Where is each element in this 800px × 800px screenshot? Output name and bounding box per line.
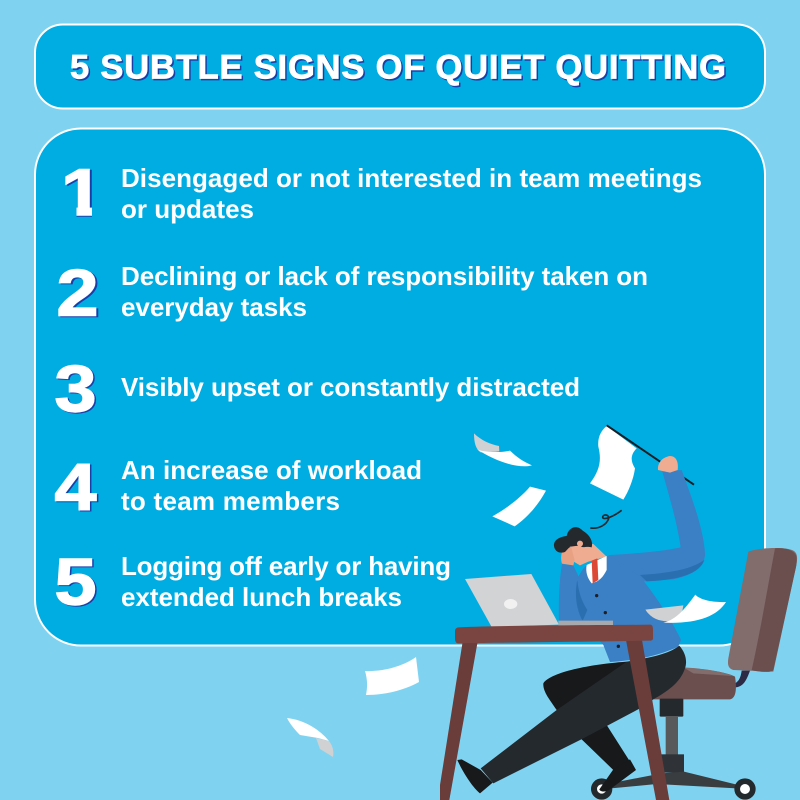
- ear: [577, 541, 583, 547]
- title: 5 SUBTLE SIGNS OF QUIET QUITTING: [72, 50, 728, 88]
- sign 4: to team members: [121, 486, 340, 516]
- hair: [554, 527, 592, 553]
- sign 2: [56, 256, 648, 330]
- flag pole: [607, 425, 694, 485]
- flying paper: middle: [492, 487, 546, 526]
- sign 4: [54, 450, 422, 524]
- far shoe: [599, 759, 636, 791]
- laptop screen: [465, 574, 559, 627]
- sign 2: Declining or lack of responsibility taken on: [121, 261, 648, 291]
- face: [570, 544, 607, 565]
- sign 1: 1: [63, 156, 105, 230]
- flying paper: top left: [474, 433, 532, 466]
- sign 5: [54, 544, 451, 620]
- title banner: [35, 24, 765, 108]
- sign 3: 3: [54, 352, 96, 426]
- flying paper: lower left: [287, 718, 333, 757]
- jacket shading: [576, 580, 587, 621]
- sign 4: 4: [54, 450, 97, 524]
- sign 4: An increase of workload: [121, 455, 422, 485]
- flying paper: by torso: [645, 595, 726, 623]
- jacket buttons: [595, 594, 620, 648]
- sign 1: [55, 155, 702, 230]
- chair seat: [653, 667, 736, 699]
- sign 2: everyday tasks: [121, 292, 307, 322]
- sign 3: [54, 352, 580, 426]
- sign 1: 1: [61, 155, 103, 229]
- hand on pole: [658, 456, 678, 473]
- sign 5: extended lunch breaks: [121, 582, 402, 612]
- sign 4: 4: [56, 450, 98, 524]
- sign 2: 2: [56, 256, 98, 330]
- laptop base: [558, 621, 613, 626]
- sign 5: 5: [54, 544, 96, 618]
- worker propping arm: [559, 564, 587, 623]
- worker raised arm: [610, 470, 705, 581]
- near shoe: [457, 759, 493, 793]
- chair bracket: [735, 671, 750, 687]
- sign 1: Disengaged or not interested in team meetings: [121, 163, 702, 193]
- near leg: [481, 646, 686, 783]
- illustration: quitting worker at desk: [440, 425, 797, 800]
- supporting hand: [561, 547, 575, 565]
- collar and tie: [586, 556, 607, 583]
- title: 5 SUBTLE SIGNS OF QUIET QUITTING: [70, 48, 726, 86]
- white flag: [590, 425, 694, 500]
- panel: signs list: [35, 128, 765, 646]
- sign 5: 5: [56, 546, 98, 620]
- desk: [440, 625, 669, 800]
- far leg: [543, 662, 630, 770]
- sign 5: Logging off early or having: [121, 551, 451, 581]
- sign 1: or updates: [121, 194, 254, 224]
- sign 3: Visibly upset or constantly distracted: [121, 372, 580, 402]
- torso: [576, 555, 681, 662]
- frustration squiggle: [590, 510, 622, 528]
- chair base: [591, 699, 756, 800]
- flying paper: lower centre: [365, 657, 419, 695]
- chair back: [728, 548, 797, 687]
- sign 2: 2: [58, 256, 100, 330]
- sign 3: 3: [56, 352, 98, 426]
